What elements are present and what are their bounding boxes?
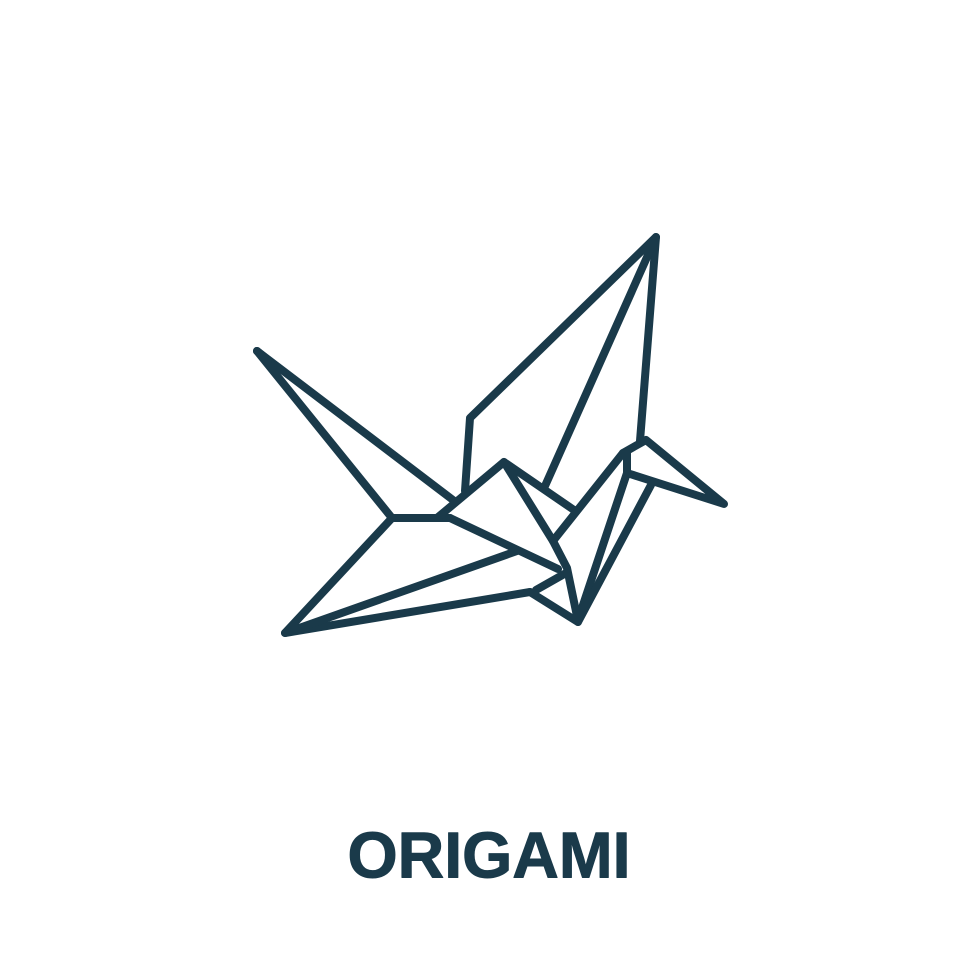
upper wing xyxy=(465,237,656,491)
head and beak xyxy=(623,440,724,504)
tail wing xyxy=(257,351,453,518)
title: ORIGAMI xyxy=(347,820,631,892)
lower body xyxy=(285,518,558,633)
neck xyxy=(553,453,651,622)
central fold xyxy=(437,462,578,622)
icon: origami crane xyxy=(257,237,724,633)
